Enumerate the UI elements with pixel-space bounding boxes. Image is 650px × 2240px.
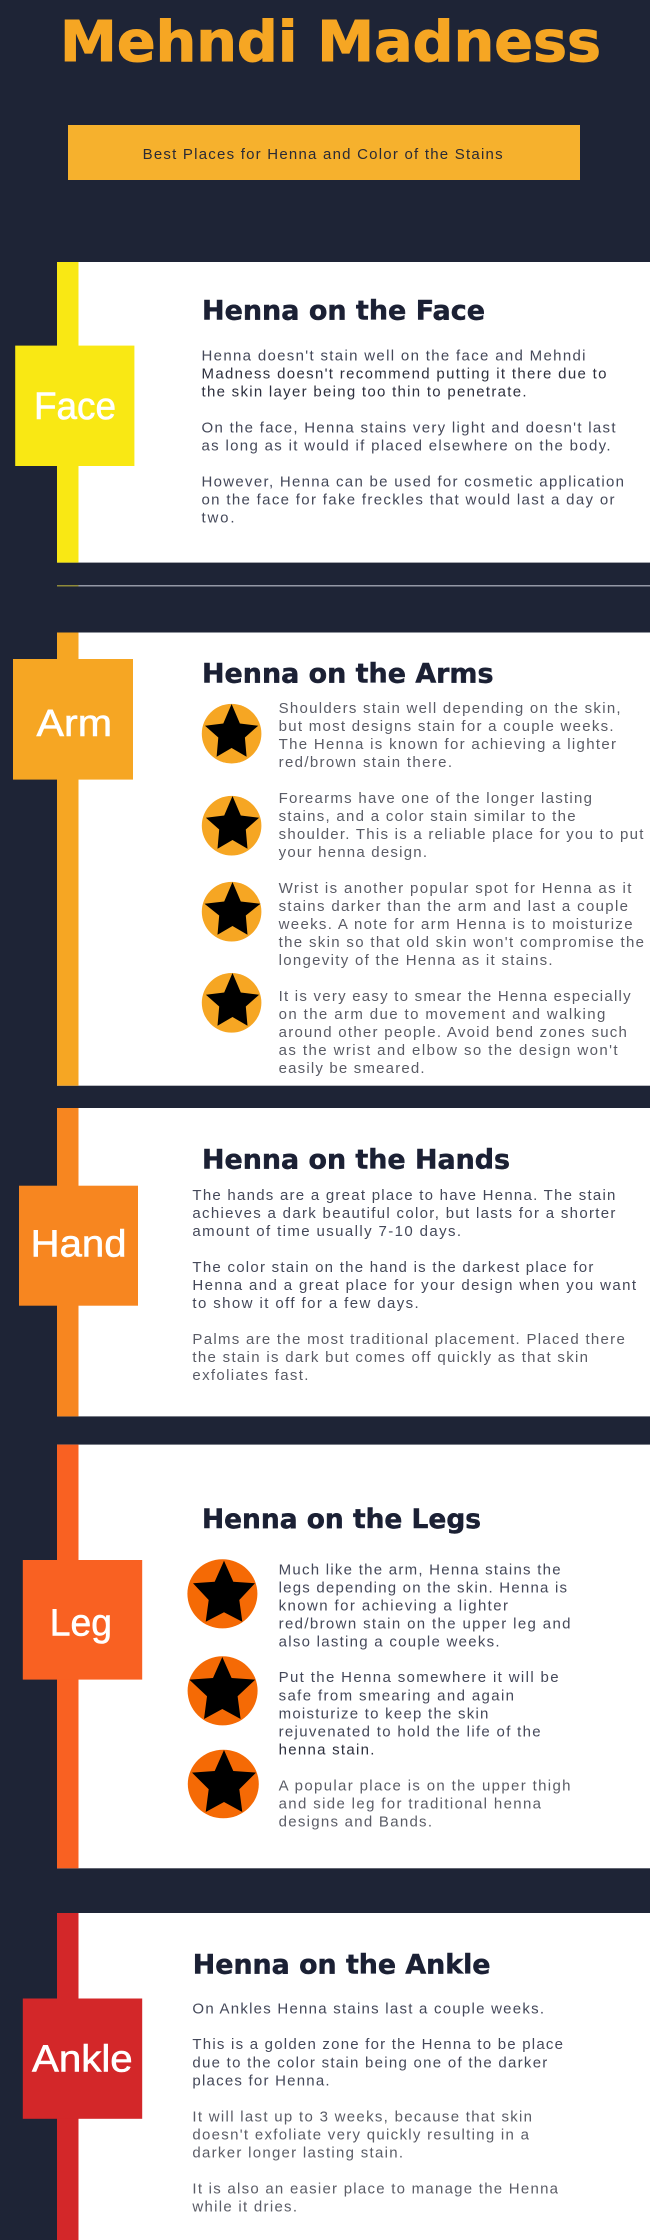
text block: forearms: Forearms have one of the longer lasting (279, 790, 592, 807)
text block: face: on the face for fake freckles that would last a day or (202, 492, 614, 508)
panel: ankle (23, 1913, 650, 2240)
text block: face: two. (202, 510, 234, 526)
text block: shoulders: The Henna is known for achieving a lighter (279, 736, 616, 753)
text block: forearms: your henna design. (279, 844, 427, 861)
text block: leg skin: legs depending on the skin. Henna is (279, 1580, 567, 1596)
text block: ankle: doesn't exfoliate very quickly resulting in a (192, 2126, 530, 2144)
heading: face: Henna on the Face (202, 296, 485, 326)
text block: ankle: while it dries. (191, 2199, 297, 2216)
text block: face: On the face, Henna stains very light and doesn't last (202, 420, 616, 436)
title: Mehndi Madness (60, 10, 601, 75)
icon: star 5 (187, 1559, 257, 1628)
text block: smearing (279, 988, 631, 1077)
text block: hands: achieves a dark beautiful color, but lasts for a shorter (192, 1205, 615, 1222)
text block: wrist (278, 880, 644, 969)
text block: hands: exfoliates fast. (192, 1367, 308, 1384)
text block: wrist: weeks. A note for arm Henna is to moisturize (278, 916, 633, 933)
text block: smearing: around other people. Avoid bend zones such (279, 1024, 627, 1041)
text block: leg moisturize (279, 1669, 559, 1758)
text block: smearing: It is very easy to smear the Henna especially (279, 988, 631, 1005)
text block: ankle: It will last up to 3 weeks, because that skin (192, 2108, 532, 2125)
text block: face (202, 348, 624, 526)
text block: thigh (279, 1778, 570, 1830)
text block: leg skin (279, 1561, 570, 1650)
heading: arms: Henna on the Arms (202, 658, 494, 690)
text block: wrist: the skin so that old skin won't compromise the (279, 934, 644, 951)
text block: ankle: This is a golden zone for the Henna to be place (192, 2036, 563, 2053)
badge: face (15, 346, 134, 466)
heading: hands: Henna on the Hands (202, 1145, 510, 1176)
text block: forearms: stains, and a color stain similar to the (279, 808, 576, 825)
text block: face: Henna doesn't stain well on the face and Mehndi (202, 348, 586, 364)
text block: hands: The hands are a great place to have Henna. The stain (192, 1187, 615, 1204)
text block: ankle: On Ankles Henna stains last a couple weeks. (192, 2000, 544, 2017)
text block: hands: Henna and a great place for your design when you want (192, 1277, 637, 1294)
panel: hands (19, 1108, 650, 1416)
text block: leg skin: Much like the arm, Henna stains the (279, 1561, 561, 1578)
subtitle banner: Best Places for Henna and Color of the Stains (143, 146, 503, 163)
text block: wrist: Wrist is another popular spot for Henna as it (279, 880, 632, 897)
badge: leg: Leg (50, 1603, 112, 1645)
text block: ankle (191, 2000, 563, 2216)
text block: smearing: as the wrist and elbow so the design won't (279, 1042, 618, 1059)
icon: star 4 (202, 973, 261, 1033)
icon: star 7 (188, 1750, 259, 1818)
text block: face: However, Henna can be used for cosmetic application (202, 474, 624, 490)
text block: wrist: stains darker than the arm and last a couple (279, 898, 628, 915)
heading: legs: Henna on the Legs (202, 1504, 481, 1535)
icon: star 6 (188, 1656, 258, 1725)
badge: leg (23, 1560, 142, 1680)
badge: arm: Arm (36, 703, 112, 745)
panel: arms (13, 632, 650, 1086)
text block: leg skin: red/brown stain on the upper leg and (279, 1616, 570, 1633)
text block: leg skin: also lasting a couple weeks. (279, 1633, 500, 1650)
text block: ankle: It is also an easier place to manage the Henna (192, 2180, 559, 2198)
icon: star 2 (202, 796, 261, 856)
badge: hand: Hand (31, 1223, 127, 1265)
text block: thigh: designs and Bands. (279, 1814, 432, 1830)
text block: hands: The color stain on the hand is the darkest place for (192, 1259, 593, 1276)
text block: face: as long as it would if placed elsewhere on the body. (202, 438, 610, 454)
text block: face: the skin layer being too thin to penetrate. (202, 384, 526, 400)
text block: shoulders: but most designs stain for a couple weeks. (279, 718, 614, 735)
text block: hands: Palms are the most traditional placement. Placed there (192, 1331, 625, 1348)
text block: shoulders: Shoulders stain well depending on the skin, (279, 700, 621, 717)
text block: hands: to show it off for a few days. (192, 1295, 419, 1312)
text block: forearms (279, 790, 644, 861)
text block: ankle: darker longer lasting stain. (192, 2145, 403, 2162)
text block: leg moisturize: Put the Henna somewhere it will be (279, 1669, 559, 1686)
badge: hand (19, 1186, 138, 1306)
panel: face (15, 262, 650, 563)
badge: ankle: Ankle (32, 2038, 133, 2080)
text block: smearing: easily be smeared. (279, 1060, 425, 1077)
text block: thigh: and side leg for traditional henna (279, 1795, 542, 1812)
text block: ankle: due to the color stain being one of the darker (192, 2054, 547, 2071)
panel: legs (23, 1445, 650, 1868)
text block: hands: amount of time usually 7-10 days. (192, 1223, 461, 1240)
text block: face: Madness doesn't recommend putting it there due to (202, 366, 606, 382)
text block: shoulders (279, 700, 621, 771)
subtitle banner (68, 125, 580, 180)
text block: leg skin: known for achieving a lighter (279, 1597, 508, 1614)
heading: ankle: Henna on the Ankle (193, 1950, 491, 1981)
icon: star 1 (202, 704, 261, 764)
text block: leg moisturize: rejuvenated to hold the life of the (279, 1724, 541, 1740)
text block: shoulders: red/brown stain there. (279, 754, 452, 771)
text block: leg moisturize: safe from smearing and again (279, 1687, 514, 1704)
text block: forearms: shoulder. This is a reliable place for you to put (279, 826, 644, 843)
text block: leg moisturize: henna stain. (279, 1741, 374, 1758)
badge: ankle (23, 1998, 142, 2119)
text block: hands: the stain is dark but comes off quickly as that skin (192, 1349, 588, 1366)
text block: hands (192, 1187, 637, 1384)
text block: smearing: on the arm due to movement and walking (279, 1006, 605, 1023)
text block: leg moisturize: moisturize to keep the skin (279, 1706, 488, 1722)
badge: arm (13, 659, 133, 780)
text block: thigh: A popular place is on the upper thigh (279, 1778, 570, 1795)
icon: star 3 (202, 882, 261, 942)
badge: face: Face (34, 386, 116, 428)
text block: ankle: places for Henna. (192, 2072, 330, 2089)
text block: wrist: longevity of the Henna as it stains. (279, 952, 553, 969)
